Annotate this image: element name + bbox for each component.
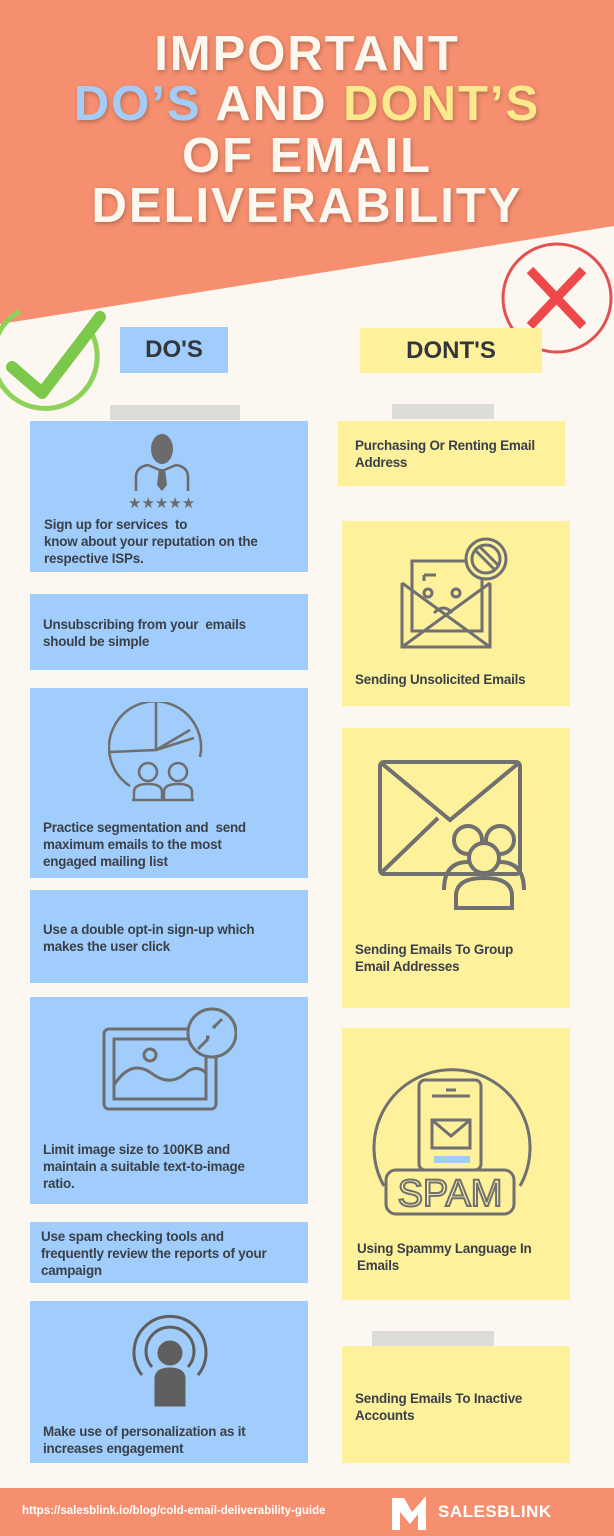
icon: check mark — [0, 309, 106, 411]
panel: dont 4 spammy language — [342, 1028, 570, 1300]
panel: dont 5 inactive: Accounts — [355, 1408, 414, 1423]
text: Limit image size to 100KB and — [43, 1142, 230, 1157]
text: know about your reputation on the — [44, 534, 258, 549]
text — [44, 517, 258, 566]
panel: dont 1 purchasing: Address — [355, 455, 407, 470]
panel: dont 1 purchasing — [338, 421, 565, 486]
panel: dont 5 inactive: Sending Emails To Inactive — [355, 1391, 522, 1406]
text: Practice segmentation and send — [43, 820, 246, 835]
icon: broadcasting person — [132, 1314, 208, 1406]
panel: do 6 spam tools: frequently review the reports of your — [41, 1246, 266, 1261]
panel: do 6 spam tools: campaign — [41, 1263, 102, 1278]
text — [357, 1241, 532, 1273]
text — [43, 820, 246, 869]
text: Sending Emails To Group — [355, 942, 513, 957]
icon: red x — [502, 242, 612, 354]
logo — [392, 1496, 552, 1530]
text: engaged mailing list — [43, 854, 168, 869]
header background — [0, 0, 614, 324]
icon: pie and people — [108, 702, 202, 802]
footer url: https://salesblink.io/blog/cold-email-deliverability-guide — [22, 1505, 326, 1517]
text: Emails — [357, 1258, 399, 1273]
text: Sending Unsolicited Emails — [355, 672, 525, 687]
text: maximum emails to the most — [43, 837, 222, 852]
text — [355, 942, 513, 974]
text — [43, 1142, 245, 1191]
panel: do 4 double opt-in: makes the user click — [43, 939, 170, 954]
heading: dont's — [360, 328, 542, 373]
icon: phone spam — [372, 1068, 532, 1216]
text: increases engagement — [43, 1441, 183, 1456]
title: DO’S AND DONT’S — [74, 77, 540, 131]
text — [43, 1424, 246, 1456]
icon: image compress — [102, 1008, 237, 1110]
title: DELIVERABILITY — [92, 179, 522, 233]
text: Sign up for services to — [44, 517, 187, 532]
heading: do's: DO'S — [145, 336, 203, 363]
icon: sad envelope — [400, 538, 508, 648]
panel: do 6 spam tools: Use spam checking tools and — [41, 1229, 224, 1244]
title: OF EMAIL — [182, 129, 432, 183]
panel: do 2 unsubscribe: should be simple — [43, 634, 149, 649]
heading: dont's: DONT'S — [406, 337, 496, 364]
text: Make use of personalization as it — [43, 1424, 246, 1439]
panel: do 6 spam tools — [30, 1222, 308, 1283]
panel: dont 5 inactive — [342, 1346, 570, 1463]
panel: dont 3 group email — [342, 728, 570, 1008]
footer — [0, 1488, 614, 1536]
panel: do 2 unsubscribe: Unsubscribing from your emails — [43, 617, 246, 632]
icon: phone spam: SPAM — [398, 1173, 502, 1215]
logo: SALESBLINK — [438, 1502, 552, 1521]
heading: do's — [120, 327, 228, 373]
panel: do 5 image size — [30, 997, 308, 1204]
panel: do 4 double opt-in: Use a double opt-in sign-up which — [43, 922, 254, 937]
panel: do 1 reputation — [30, 421, 308, 572]
panel: do 7 personalization — [30, 1301, 308, 1463]
text: ratio. — [43, 1176, 75, 1191]
panel: do 4 double opt-in — [30, 890, 308, 983]
icon: person with stars — [128, 434, 195, 509]
icon: envelope with group — [378, 760, 526, 910]
title: IMPORTANT — [154, 27, 460, 81]
text: Email Addresses — [355, 959, 459, 974]
text: respective ISPs. — [44, 551, 144, 566]
title — [74, 27, 540, 233]
panel: dont 1 purchasing: Purchasing Or Renting Email — [355, 438, 535, 453]
text: maintain a suitable text-to-image — [43, 1159, 245, 1174]
panel: do 2 unsubscribe — [30, 594, 308, 670]
panel: do 3 segmentation — [30, 688, 308, 878]
panel: dont 2 unsolicited — [342, 521, 570, 706]
text: Using Spammy Language In — [357, 1241, 532, 1256]
